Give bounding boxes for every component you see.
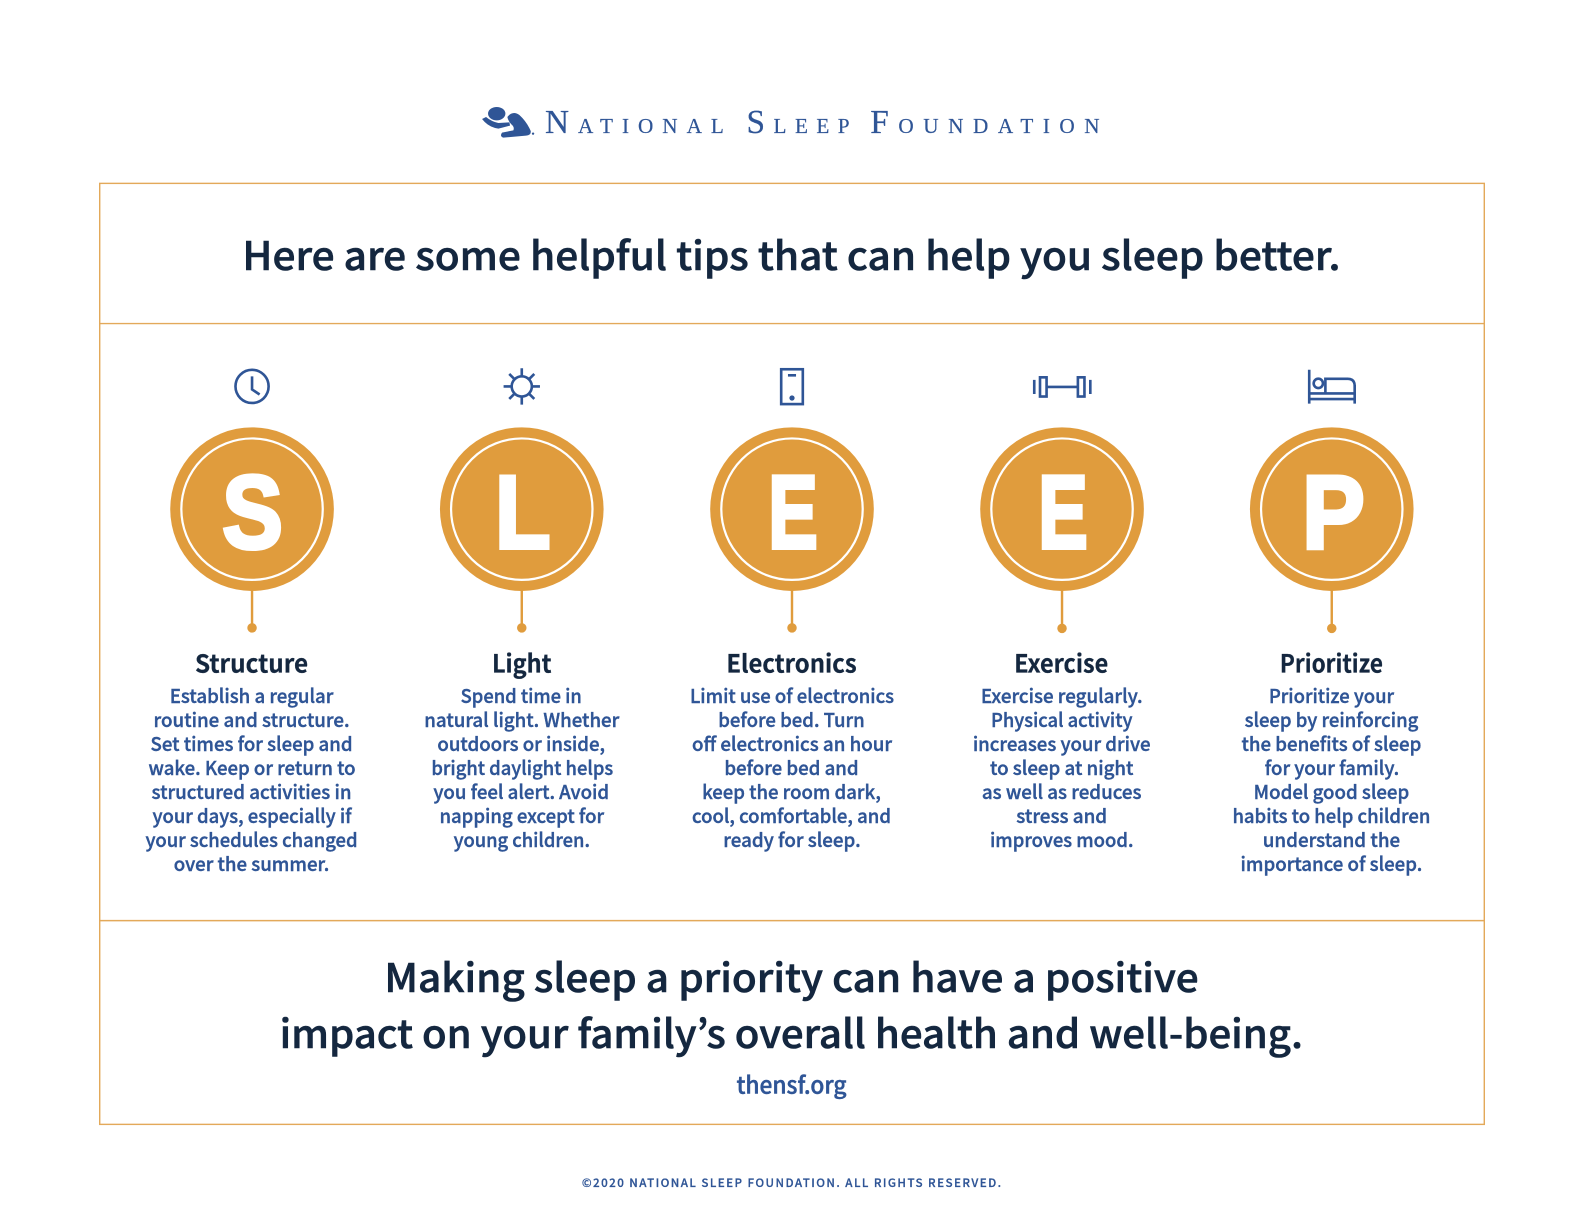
letter badge S — [170, 427, 334, 633]
text: Electronics description: before bed and — [724, 754, 859, 781]
text: Electronics description: keep the room dark, — [702, 778, 881, 805]
text: Exercise description: to sleep at night — [990, 754, 1134, 781]
closing statement: Making sleep a priority can have a positive — [384, 948, 1199, 1004]
text: Prioritize description: for your family. — [1265, 754, 1399, 781]
text: Electronics description: before bed. Turn — [718, 706, 865, 733]
logo: National Sleep Foundation: F OUNDATION — [870, 104, 1100, 141]
title: Prioritize: Prioritize — [1280, 644, 1383, 680]
text: Exercise description: Exercise regularly. — [981, 682, 1143, 709]
text: Prioritize description: importance of sleep. — [1241, 850, 1422, 877]
text: Exercise description: increases your drive — [973, 730, 1151, 757]
text: Light description: napping except for — [439, 802, 604, 829]
letter badge E: E — [1038, 455, 1088, 571]
closing statement — [280, 948, 1303, 1060]
panel: P Prioritize — [1232, 370, 1430, 877]
letter badge L — [440, 427, 604, 633]
logo: National Sleep Foundation: S LEEP — [747, 104, 850, 141]
icon: clock — [235, 370, 269, 403]
text: Electronics description: ready for sleep. — [723, 826, 861, 853]
frame with dividers — [100, 183, 1484, 1124]
text: Structure description: routine and structure. — [154, 706, 350, 733]
text: Structure description: Establish a regular — [170, 682, 334, 709]
icon: dumbbell — [1034, 377, 1090, 397]
text: Prioritize description: Prioritize your — [1269, 682, 1394, 709]
icon: bed — [1309, 370, 1355, 404]
text: Prioritize description: the benefits of sleep — [1242, 730, 1421, 757]
closing statement: impact on your family’s overall health and well-being. — [280, 1004, 1303, 1060]
text: Electronics description: Limit use of electronics — [690, 682, 894, 709]
logo: National Sleep Foundation — [482, 104, 1100, 141]
icon: sun — [504, 368, 540, 405]
panel: E Exercise — [973, 377, 1151, 853]
title: Exercise: Exercise — [1014, 644, 1108, 680]
footer copyright: ©2020 NATIONAL SLEEP FOUNDATION. ALL RIGHTS RESERVED. — [582, 1175, 1001, 1191]
title: Light: Light — [492, 644, 552, 680]
letter badge P — [1250, 427, 1414, 633]
letter badge E — [980, 427, 1144, 633]
text: Structure description: wake. Keep or return to — [148, 754, 356, 781]
text: Light description: you feel alert. Avoid — [433, 778, 609, 805]
text: Structure description: your schedules changed — [145, 826, 358, 853]
text: Structure description: structured activities in — [152, 778, 352, 805]
text: Prioritize description: habits to help children — [1232, 802, 1430, 829]
text: Prioritize description — [1232, 682, 1430, 877]
text: Electronics description: off electronics an hour — [692, 730, 892, 757]
text: Structure description: over the summer. — [174, 850, 329, 877]
text: Structure description: Set times for sleep and — [151, 730, 353, 757]
heading: Here are some helpful tips that can help you sleep better. — [242, 226, 1341, 282]
letter badge E — [710, 427, 874, 633]
text: Light description: outdoors or inside, — [437, 730, 605, 757]
panel: L Light — [424, 368, 619, 853]
letter badge L: L — [495, 455, 551, 571]
text: Exercise description: stress and — [1016, 802, 1107, 829]
text: Light description — [424, 682, 619, 853]
text: Exercise description: as well as reduces — [982, 778, 1142, 805]
text: Exercise description: improves mood. — [990, 826, 1133, 853]
text: Structure description — [145, 682, 358, 877]
website link text: thensf.org — [736, 1066, 847, 1100]
text: Structure description: your days, especially if — [153, 802, 353, 829]
text: Electronics description — [690, 682, 894, 853]
text: Exercise description: Physical activity — [991, 706, 1133, 733]
text: Prioritize description: sleep by reinforcing — [1245, 706, 1418, 733]
letter badge P: P — [1302, 455, 1365, 571]
text: Prioritize description: understand the — [1263, 826, 1400, 853]
text: Electronics description: cool, comfortable, and — [692, 802, 891, 829]
icon: phone — [781, 369, 803, 404]
logo wordmark: N ATIONAL — [545, 104, 724, 141]
letter badge E: E — [768, 455, 818, 571]
letter badge S: S — [222, 455, 283, 571]
text: Exercise description — [973, 682, 1151, 853]
text: Light description: natural light. Whether — [424, 706, 619, 733]
text: Light description: young children. — [454, 826, 590, 853]
panel: E Electronics — [690, 369, 894, 853]
title: Electronics: Electronics — [726, 644, 857, 680]
text: Light description: Spend time in — [461, 682, 582, 709]
text: Prioritize description: Model good sleep — [1254, 778, 1409, 805]
text: Light description: bright daylight helps — [431, 754, 613, 781]
icon: sleeping person — [482, 107, 534, 138]
title: Structure: Structure — [195, 644, 308, 680]
panel: S Structure — [145, 370, 358, 877]
